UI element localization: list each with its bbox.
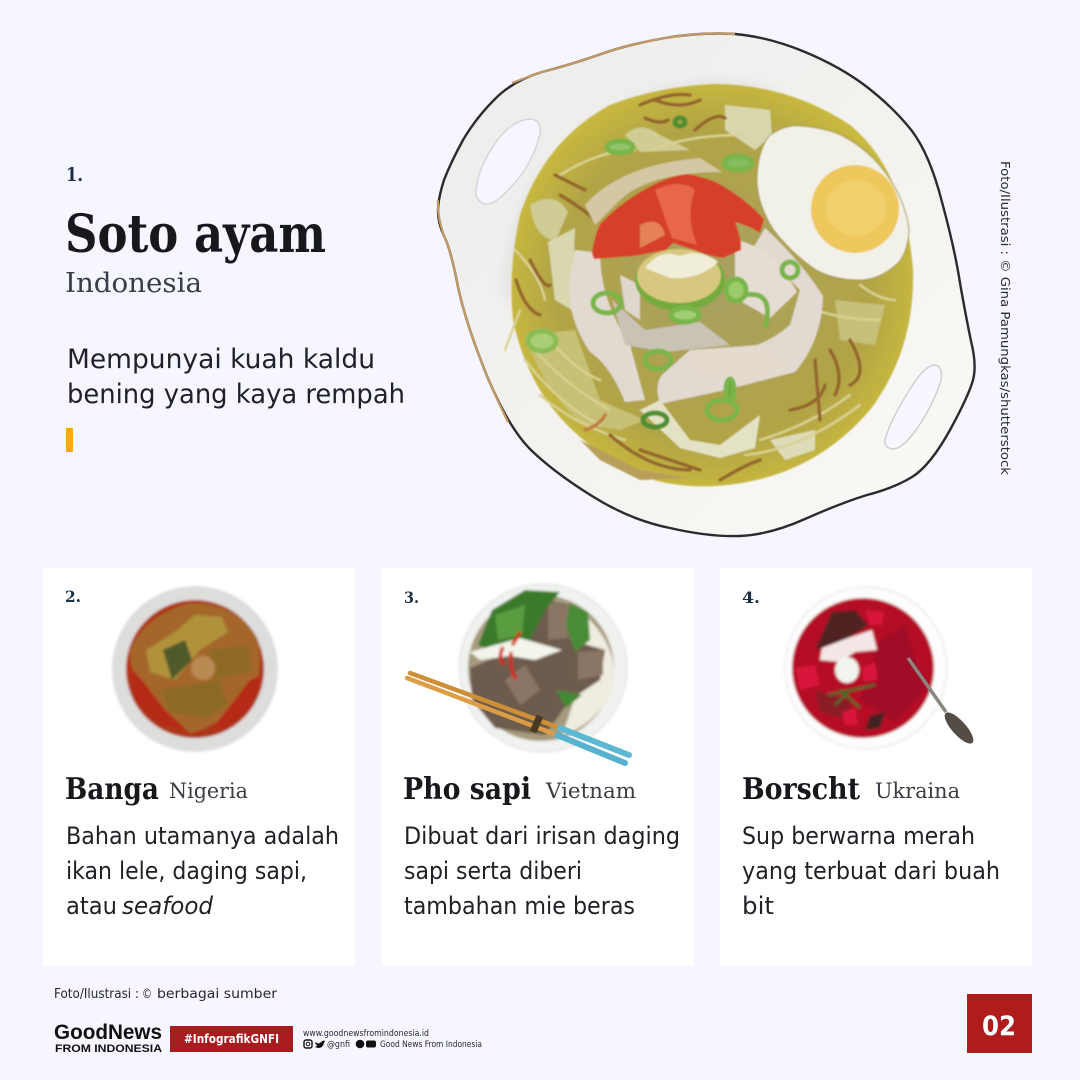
broth (512, 84, 913, 486)
number: 3: 3. (404, 588, 419, 607)
country: Ukraina: Ukraina (875, 779, 960, 803)
social links: @gnfi (327, 1040, 350, 1050)
social links: www.goodnewsfromindonesia.id (303, 1029, 429, 1039)
icon: twitter (315, 1041, 325, 1048)
description: Pho sapi (404, 822, 680, 920)
number: 2: 2. (65, 587, 81, 606)
description: Borscht: bit (742, 892, 774, 920)
number: 1: 1. (66, 164, 83, 186)
green onions (528, 118, 798, 427)
description: Borscht: Sup berwarna merah (742, 822, 975, 850)
badge: #InfografikGNFI: #InfografikGNFI (184, 1032, 279, 1046)
photo credit: Foto/Ilustrasi : © Gina Pamungkas/shutterstock (998, 161, 1012, 475)
logo: GoodNews From Indonesia: FROM INDONESIA (55, 1043, 162, 1055)
shredded chicken (569, 158, 823, 404)
chopsticks (407, 673, 629, 763)
icon: youtube (366, 1040, 376, 1048)
description: Pho sapi: sapi serta diberi (404, 857, 582, 885)
panel: Pho sapi (382, 568, 694, 966)
page number (967, 994, 1032, 1053)
accent bar (66, 428, 73, 452)
icon: facebook (356, 1040, 364, 1048)
cabbage strands (505, 135, 895, 455)
description: soto ayam: bening yang kaya rempah (67, 379, 405, 410)
description: Pho sapi: tambahan mie beras (404, 892, 635, 920)
country: Vietnam: Vietnam (545, 779, 636, 803)
social links: Good News From Indonesia (380, 1040, 482, 1050)
heading: Soto ayam: Soto ayam (65, 204, 326, 265)
footer photo source: © (142, 987, 152, 1002)
number: 4: 4. (742, 588, 760, 607)
title: Banga: Banga (65, 772, 159, 807)
social links (303, 1029, 482, 1050)
panel: Borscht (720, 568, 1032, 966)
title: Pho sapi: Pho sapi (403, 772, 531, 807)
description: Banga: seafood (122, 892, 214, 920)
description: Borscht: yang terbuat dari buah (742, 857, 1000, 885)
photo: pho bowl with chopsticks (407, 584, 629, 763)
description: Banga: ikan lele, daging sapi, (66, 857, 307, 885)
boiled egg (757, 126, 909, 280)
country: Nigeria: Nigeria (169, 779, 248, 803)
spoon (908, 658, 978, 748)
description: Banga: Bahan utamanya adalah (66, 822, 339, 850)
photo: soto ayam bowl (438, 34, 975, 536)
fried shallots (516, 94, 860, 480)
footer photo source: berbagai sumber (157, 987, 278, 1002)
inner bowl shade (505, 82, 790, 300)
handle slots (476, 119, 540, 204)
description: soto ayam (67, 344, 405, 410)
icon: instagram (304, 1040, 312, 1048)
photo: borscht bowl with spoon (785, 587, 978, 749)
tomato (592, 174, 764, 259)
logo: GoodNews From Indonesia: GoodNews (54, 1021, 162, 1044)
footer photo source: Foto/Ilustrasi : (54, 987, 139, 1002)
footer photo source (54, 987, 278, 1002)
description: Banga (66, 822, 339, 920)
badge: #InfografikGNFI (170, 1026, 293, 1052)
cabbage (525, 105, 885, 480)
logo: GoodNews From Indonesia (54, 1021, 162, 1055)
description: Borscht (742, 822, 1000, 920)
page number: 02 (982, 1011, 1016, 1042)
country: Indonesia: Indonesia (65, 268, 202, 299)
description: soto ayam: Mempunyai kuah kaldu (67, 344, 375, 375)
panel: Banga (43, 568, 355, 966)
title: Borscht: Borscht (742, 772, 860, 807)
description: Pho sapi: Dibuat dari irisan daging (404, 822, 680, 850)
photo: banga plate (112, 586, 278, 752)
lime (635, 249, 725, 311)
description: Banga: atau (66, 892, 117, 920)
